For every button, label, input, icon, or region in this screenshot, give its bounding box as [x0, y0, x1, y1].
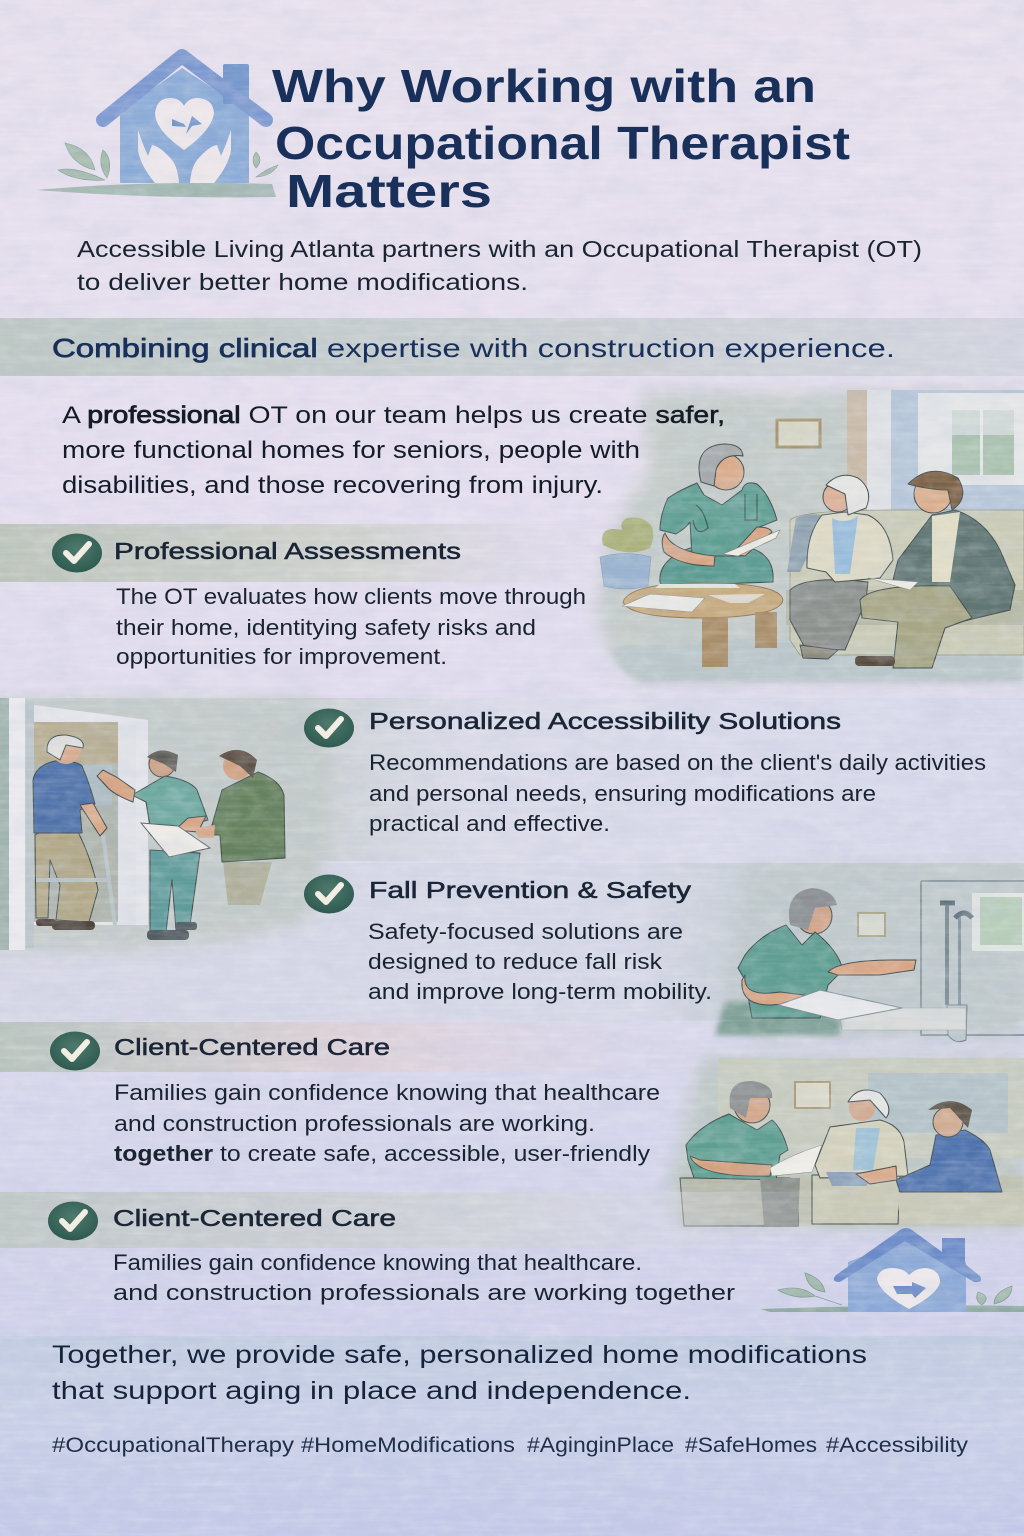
figure: older woman [790, 475, 893, 659]
title: Matters [286, 165, 492, 217]
item: fall prevention and safety: Fall Prevention & Safety [369, 877, 692, 903]
item: personalized accessibility solutions: practical and effective. [369, 811, 610, 836]
figure: therapist pointing [738, 888, 916, 1020]
illustration: therapist reviewing bathroom plan [715, 868, 1024, 1042]
band: combining expertise [0, 318, 1024, 376]
item: professional assessments: The OT evaluates how clients move through [116, 584, 586, 609]
illustration: therapist checking doorway with client [0, 698, 330, 952]
intro text: to deliver better home modifications. [77, 269, 528, 295]
title: Occupational Therapist [275, 117, 850, 169]
item: fall prevention and safety [304, 874, 712, 1004]
item: fall prevention and safety: and improve long-term mobility. [368, 979, 712, 1004]
figure: older client from behind [33, 734, 115, 930]
illustration: family and therapist reviewing plans on sofa [667, 1058, 1024, 1228]
item: fall prevention and safety: designed to reduce fall risk [368, 949, 663, 974]
logo: house with heart and caring hands [37, 56, 278, 197]
item: client-centered care second: and construction professionals are working together [113, 1280, 735, 1305]
hashtags: #HomeModifications [301, 1434, 515, 1457]
intro text [77, 236, 922, 295]
item: professional assessments: opportunities for improvement. [116, 644, 447, 669]
panel: fall prevention background [0, 863, 1024, 1021]
item: client-centered care second [48, 1202, 735, 1305]
item: client-centered care second: Client-Centered Care [113, 1205, 396, 1231]
lead paragraph: disabilities, and those recovering from injury. [62, 472, 603, 499]
panel: footer background [0, 1336, 1024, 1536]
banner heading: Combining clinical expertise with construction experience. [52, 333, 895, 363]
item: client-centered care first: and construction professionals are working. [114, 1111, 595, 1136]
coffee table with papers [622, 583, 783, 667]
figure: older woman seated [812, 1090, 908, 1224]
figure: man in blue sweater [856, 1101, 1024, 1224]
band: client-centered care second [0, 1192, 830, 1248]
title: Why Working with an [272, 60, 816, 112]
figure: adult son [855, 471, 1015, 668]
hashtags: #OccupationalTherapy [52, 1434, 295, 1457]
figure: therapist seated [680, 1081, 822, 1226]
illustration: occupational therapist with clients in living room [598, 390, 1024, 682]
panel: personalized solutions background [0, 698, 1024, 861]
closing statement [52, 1341, 867, 1405]
band: client-centered care first [0, 1022, 720, 1072]
item: professional assessments: Professional Assessments [114, 538, 461, 564]
item: professional assessments: their home, identitying safety risks and [116, 615, 536, 640]
item: personalized accessibility solutions: Personalized Accessibility Solutions [369, 708, 841, 734]
figure: family member in green jacket [195, 750, 285, 905]
item: client-centered care first: together to create safe, accessible, user-friendly [114, 1141, 650, 1166]
figure: therapist with clipboard [97, 750, 210, 940]
closing statement: that support aging in place and independence. [52, 1377, 691, 1405]
title [272, 60, 850, 217]
hashtags: #SafeHomes [685, 1434, 817, 1457]
lead paragraph: more functional homes for seniors, people with [62, 437, 640, 464]
item: personalized accessibility solutions: Recommendations are based on the client's daily activities [369, 750, 986, 775]
item: personalized accessibility solutions [304, 708, 986, 836]
icon: small house with heart [760, 1228, 1024, 1312]
sofa [790, 510, 1024, 655]
lead paragraph: A professional OT on our team helps us create safer, [62, 402, 725, 429]
intro text: Accessible Living Atlanta partners with an Occupational Therapist (OT) [77, 236, 922, 262]
item: client-centered care first: Families gain confidence knowing that healthcare [114, 1080, 660, 1105]
hashtags [52, 1434, 969, 1457]
item: fall prevention and safety: Safety-focused solutions are [368, 919, 683, 944]
closing statement: Together, we provide safe, personalized home modifications [52, 1341, 867, 1369]
item: professional assessments [52, 534, 586, 669]
item: personalized accessibility solutions: and personal needs, ensuring modifications are [369, 781, 876, 806]
figure: therapist in scrubs [660, 444, 780, 586]
item: client-centered care first: Client-Centered Care [114, 1034, 390, 1060]
lead paragraph [62, 402, 725, 499]
item: client-centered care first [50, 1032, 660, 1166]
plant pot [600, 554, 651, 589]
item: client-centered care second: Families gain confidence knowing that healthcare. [113, 1250, 642, 1275]
hashtags: #Accessibility [826, 1434, 969, 1457]
hashtags: #AginginPlace [527, 1434, 674, 1457]
band: professional assessments [0, 524, 610, 582]
